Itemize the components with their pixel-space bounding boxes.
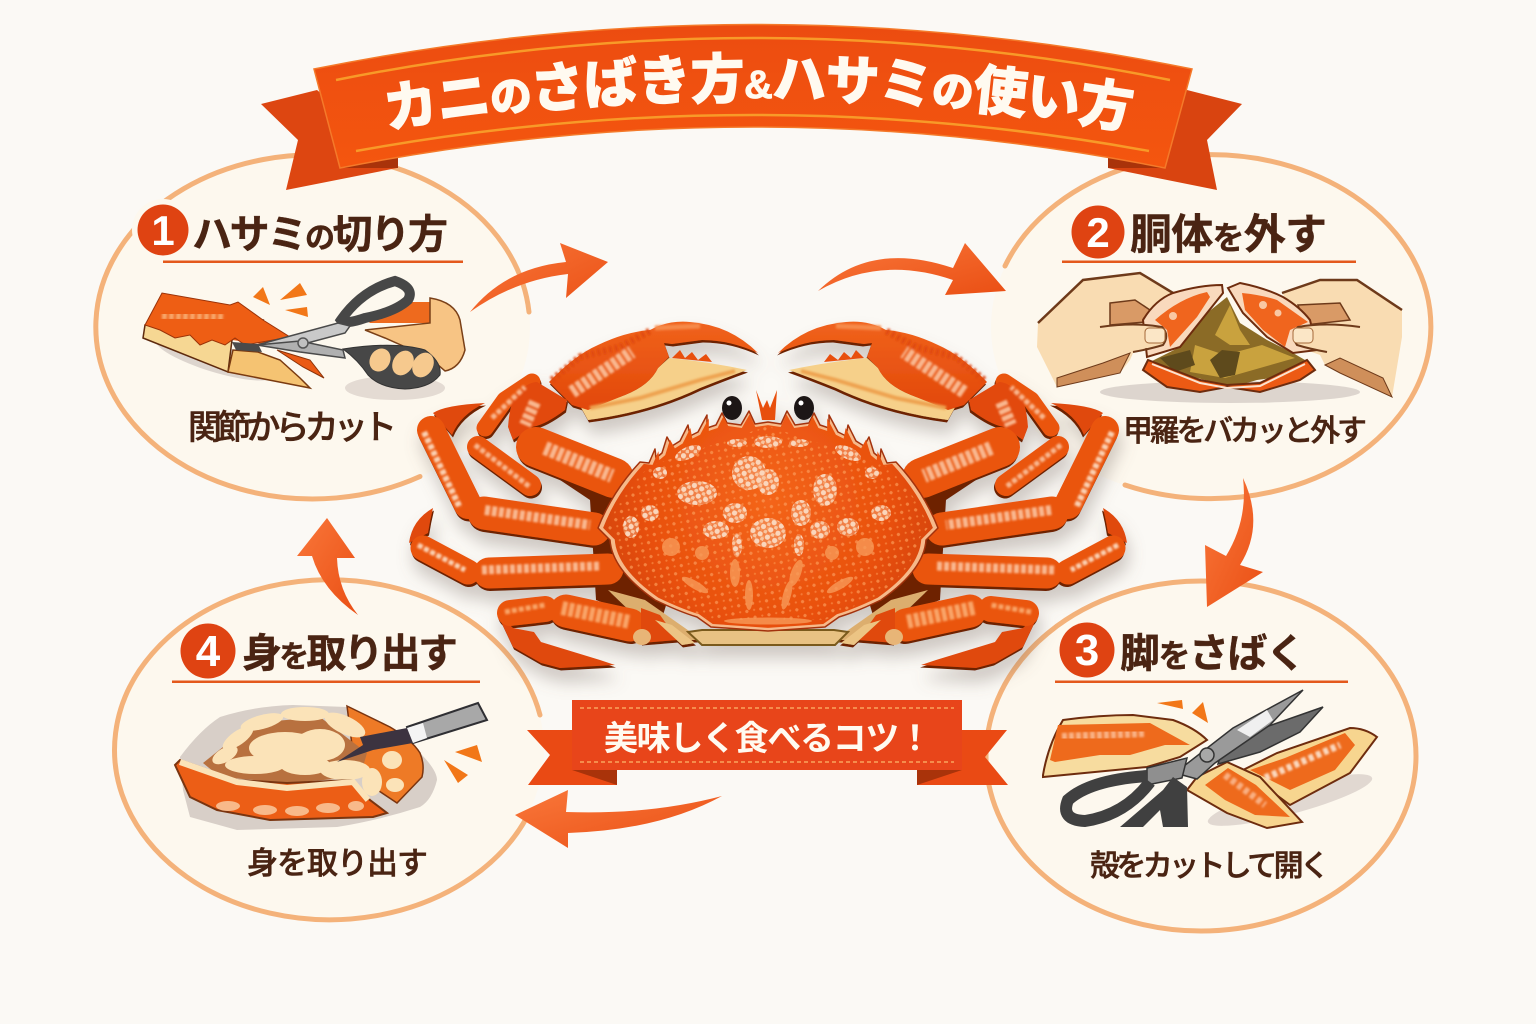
arrow: step 2 to step 3 (1205, 478, 1263, 607)
step 4 heading (172, 624, 480, 683)
icon: hands opening crab shell (1037, 273, 1402, 403)
crab right half: mirrored legs and claw (778, 322, 1127, 668)
ribbon text: 美味しく食べるコツ！ (604, 720, 932, 758)
caption: step 3: 殻をカットして開く (1090, 850, 1330, 883)
caption: step 4: 身を取り出す (247, 846, 428, 881)
step 4 heading: 身を取り出す (242, 632, 458, 676)
arrow: toward step 4 (515, 790, 722, 848)
ribbon: tips (527, 700, 1008, 785)
crab eyes (722, 396, 814, 420)
panel: step 3 circle (986, 581, 1416, 931)
panel: step 4 circle (114, 579, 544, 920)
step 1 heading: 1 (151, 207, 175, 254)
crab illustration (409, 322, 1127, 668)
step 3 heading (1055, 622, 1348, 683)
arrow: step 4 to step 1 (297, 518, 358, 615)
step 2 heading: 2 (1086, 209, 1110, 256)
arrow: step 1 to step 2 left (470, 243, 608, 312)
step 2 heading: 胴体を外す (1130, 211, 1327, 258)
caption: step 2: 甲羅をバカッと外す (1123, 415, 1367, 448)
panel: step 1 circle (96, 155, 530, 499)
icon: removing crab meat (175, 703, 487, 830)
step 3 heading: 3 (1075, 626, 1099, 675)
icon: cutting claw with scissors (143, 281, 465, 400)
caption: step 1: 関節からカット (188, 409, 397, 447)
step 1 heading (132, 199, 463, 263)
crab lower plate (688, 630, 848, 645)
arrow: into step 2 (818, 243, 1006, 295)
step 3 heading: 脚をさばく (1120, 632, 1306, 676)
step 1 heading: ハサミの切り方 (192, 213, 448, 257)
title banner (261, 24, 1242, 190)
step 4 heading: 4 (196, 627, 221, 676)
crab horn (756, 390, 777, 420)
step 2 heading (1062, 206, 1356, 263)
icon: scissors cutting crab legs (1043, 690, 1377, 836)
crab left half: legs and claw (409, 322, 758, 668)
title text: カニのさばき方&ハサミの使い方 (386, 51, 1134, 131)
crab carapace (598, 411, 938, 631)
panel: step 2 circle (991, 155, 1431, 499)
